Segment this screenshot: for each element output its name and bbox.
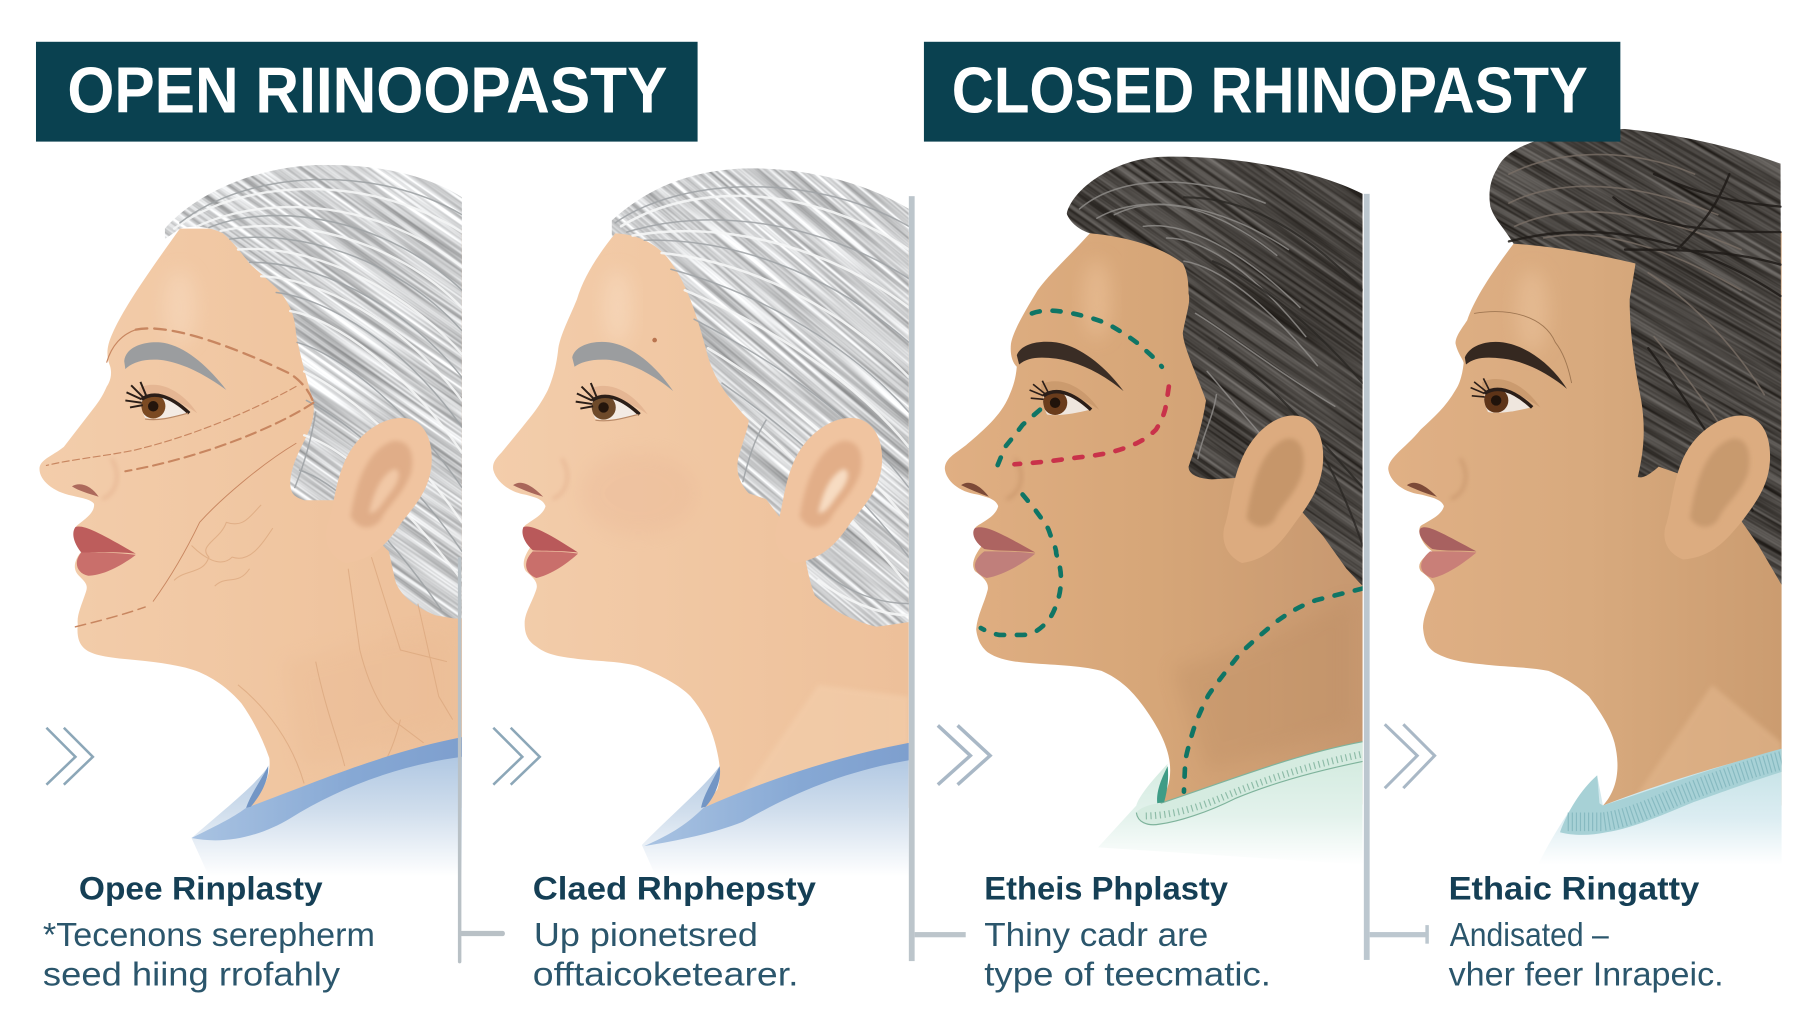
ear bbox=[776, 418, 882, 563]
caption: panel 4: vher feer Inrapeic. bbox=[1449, 956, 1724, 993]
caption: panel 1: Opee Rinplasty bbox=[79, 871, 323, 907]
lips bbox=[1419, 527, 1476, 578]
heading banner: closed rhinoplasty: CLOSED RHINOPASTY bbox=[952, 54, 1588, 127]
incision dashes green bbox=[981, 311, 1363, 792]
nose wing and nostril bbox=[1407, 458, 1466, 499]
heading banner: open rhinoplasty: OPEN RIINOOPASTY bbox=[67, 54, 667, 127]
eyebrow bbox=[572, 342, 673, 391]
caption: panel 4: Ethaic Ringatty bbox=[1449, 871, 1699, 907]
incision dashes bbox=[46, 328, 313, 627]
caption: panel 2: Claed Rhphepsty bbox=[533, 871, 816, 907]
icon: chevrons panel 1 bbox=[46, 728, 93, 785]
panel: darker-skinned man with dotted incision lines bbox=[944, 156, 1363, 850]
caption: panel 2: offtaicoketearer. bbox=[533, 956, 799, 993]
panel: man after surgery bbox=[1388, 128, 1782, 854]
caption: panel 3: type of teecmatic. bbox=[984, 956, 1271, 993]
eye bbox=[576, 383, 648, 424]
lips bbox=[973, 527, 1035, 578]
mole bbox=[652, 338, 657, 342]
eyebrow bbox=[1017, 342, 1124, 391]
hair: dark textured bbox=[1490, 128, 1782, 584]
eye bbox=[125, 382, 197, 423]
heading banner: closed rhinoplasty bbox=[924, 42, 1620, 142]
eye bbox=[1471, 378, 1540, 417]
incision dashes red bbox=[1014, 387, 1169, 464]
head and neck skin bbox=[493, 232, 909, 808]
forehead thin line bbox=[1474, 312, 1572, 383]
heading banner: open rhinoplasty bbox=[36, 42, 698, 142]
facial shading bbox=[164, 270, 447, 766]
hair: silver swept back bbox=[164, 165, 462, 618]
facial shading bbox=[1516, 269, 1782, 795]
nose wing and nostril bbox=[72, 458, 117, 499]
caption: panel 1: seed hiing rrofahly bbox=[43, 956, 340, 993]
caption: panel 1: *Tecenons serepherm bbox=[43, 917, 375, 954]
divider: between panels 3 and 4 bbox=[1364, 194, 1429, 960]
head and neck skin bbox=[1388, 232, 1782, 806]
shirt collar bbox=[1099, 741, 1363, 850]
panel: woman after surgery bbox=[493, 168, 909, 865]
ear bbox=[334, 418, 432, 546]
neck and cheek wrinkle lines bbox=[174, 505, 453, 783]
eye bbox=[1030, 381, 1099, 419]
nose wing and nostril bbox=[961, 458, 1021, 499]
facial shading bbox=[1083, 260, 1352, 772]
icon: chevrons panel 4 bbox=[1385, 724, 1435, 788]
caption: panel 3: Etheis Phplasty bbox=[984, 871, 1228, 907]
caption: panel 3: Thiny cadr are bbox=[984, 917, 1208, 954]
caption: panel 1 bbox=[43, 871, 375, 993]
hair: silver long with low bun bbox=[612, 168, 909, 627]
icon: chevrons panel 2 bbox=[493, 728, 540, 785]
eyebrow bbox=[1465, 342, 1567, 389]
caption: panel 4: Andisated – bbox=[1450, 917, 1609, 954]
shirt collar bbox=[642, 743, 909, 876]
divider: between panels 2 and 3 bbox=[909, 196, 966, 961]
nose wing and nostril bbox=[513, 458, 567, 499]
shirt collar bbox=[1538, 749, 1782, 865]
lips bbox=[522, 527, 578, 578]
caption: panel 4 bbox=[1449, 871, 1724, 993]
lips bbox=[73, 527, 136, 576]
caption: panel 2: Up pionetsred bbox=[534, 917, 758, 954]
caption: panel 3 bbox=[984, 871, 1271, 993]
hair: dark grey swept back bbox=[1066, 156, 1363, 586]
eyebrow bbox=[124, 342, 226, 390]
shirt collar bbox=[192, 737, 462, 876]
panel: older woman with incision marks bbox=[40, 165, 462, 865]
head and neck skin bbox=[945, 221, 1363, 804]
icon: chevrons panel 3 bbox=[938, 725, 990, 785]
divider: between panels 1 and 2 bbox=[458, 557, 505, 963]
head and neck skin bbox=[39, 229, 462, 808]
ear bbox=[1223, 416, 1323, 563]
caption: panel 2 bbox=[533, 871, 816, 993]
facial shading bbox=[580, 270, 909, 801]
ear bbox=[1664, 416, 1770, 559]
